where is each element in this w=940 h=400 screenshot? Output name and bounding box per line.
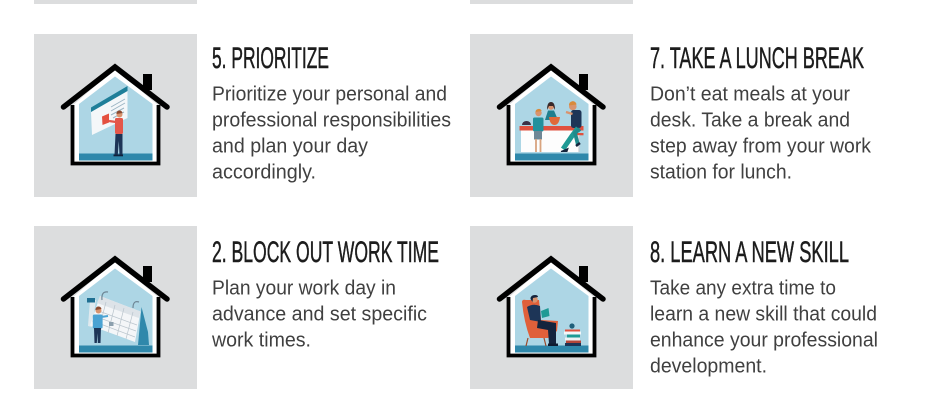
panel: tip 7 lunch break bbox=[470, 34, 872, 197]
icon: house with person at a calendar bbox=[34, 226, 197, 389]
heading: 5. prioritize: 5. PRIORITIZE bbox=[212, 42, 329, 75]
text block: learn a new skill: learn a new skill that could bbox=[650, 304, 877, 326]
panel: tip 5 prioritize bbox=[34, 34, 451, 197]
text block: learn a new skill: Take any extra time to bbox=[650, 278, 836, 300]
heading: 2. block out work time: 2. BLOCK OUT WORK TIME bbox=[212, 236, 439, 269]
text block: lunch break bbox=[650, 84, 872, 184]
text block: prioritize: professional responsibilities bbox=[212, 110, 451, 132]
text block: block out work time: work times. bbox=[211, 330, 311, 352]
text block: prioritize bbox=[212, 84, 451, 184]
text block: lunch break: desk. Take a break and bbox=[650, 110, 850, 132]
panel: tip 8 learn a new skill bbox=[470, 226, 878, 389]
text block: lunch break: step away from your work bbox=[650, 136, 872, 158]
text block: block out work time bbox=[211, 278, 427, 352]
cropped tile: previous row right bbox=[470, 0, 633, 4]
text block: lunch break: Don’t eat meals at your bbox=[650, 84, 850, 106]
text block: lunch break: station for lunch. bbox=[650, 162, 792, 184]
icon: house with family at kitchen counter bbox=[470, 34, 633, 197]
text block: learn a new skill: development. bbox=[650, 356, 767, 378]
cropped tile: previous row left bbox=[34, 0, 197, 4]
icon: house with person reading in armchair bbox=[470, 226, 633, 389]
text block: prioritize: and plan your day bbox=[212, 136, 368, 158]
text block: block out work time: advance and set specific bbox=[212, 304, 427, 326]
text block: learn a new skill: enhance your professional bbox=[650, 330, 878, 352]
text block: block out work time: Plan your work day in bbox=[212, 278, 396, 300]
text block: learn a new skill bbox=[650, 278, 878, 378]
panel: tip 2 block out work time bbox=[34, 226, 439, 389]
icon: house with person at a screen bbox=[34, 34, 197, 197]
text block: prioritize: accordingly. bbox=[212, 162, 316, 184]
text block: prioritize: Prioritize your personal and bbox=[212, 84, 447, 106]
